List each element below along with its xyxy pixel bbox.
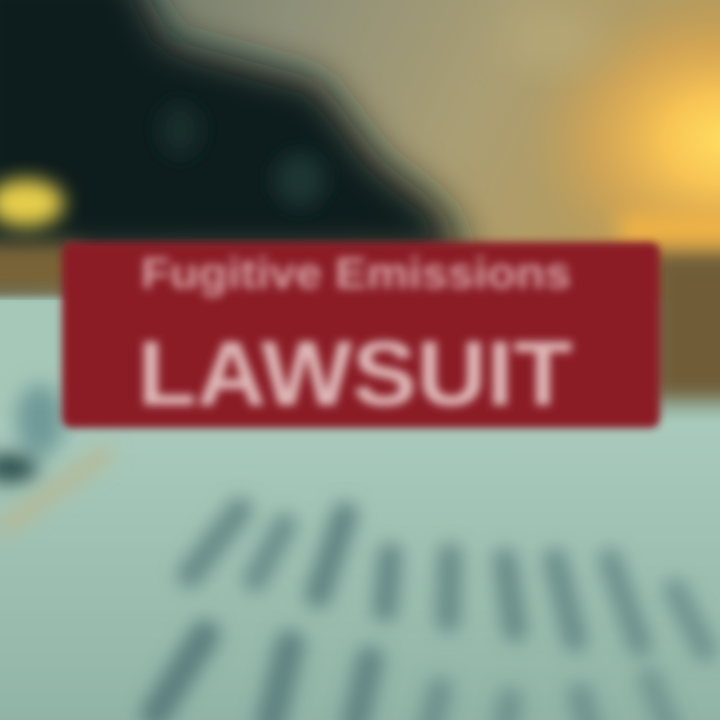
blurred document text strokes — [155, 510, 705, 720]
heading: LAWSUIT: LAWSUIT — [138, 323, 572, 425]
background: pale ground with documents — [0, 298, 720, 720]
heading: banner top line: Fugitive Emissions — [141, 249, 571, 298]
dark object at left edge — [0, 384, 64, 482]
background: tree canopy highlights — [158, 102, 326, 208]
icon: yellow light glow — [0, 179, 64, 227]
background: dark tree line — [0, 0, 470, 260]
panel: red lawsuit banner — [62, 242, 660, 428]
tan stripe on paper — [0, 450, 110, 530]
background: horizon band — [0, 215, 720, 400]
background: sky at sunset — [0, 0, 720, 300]
